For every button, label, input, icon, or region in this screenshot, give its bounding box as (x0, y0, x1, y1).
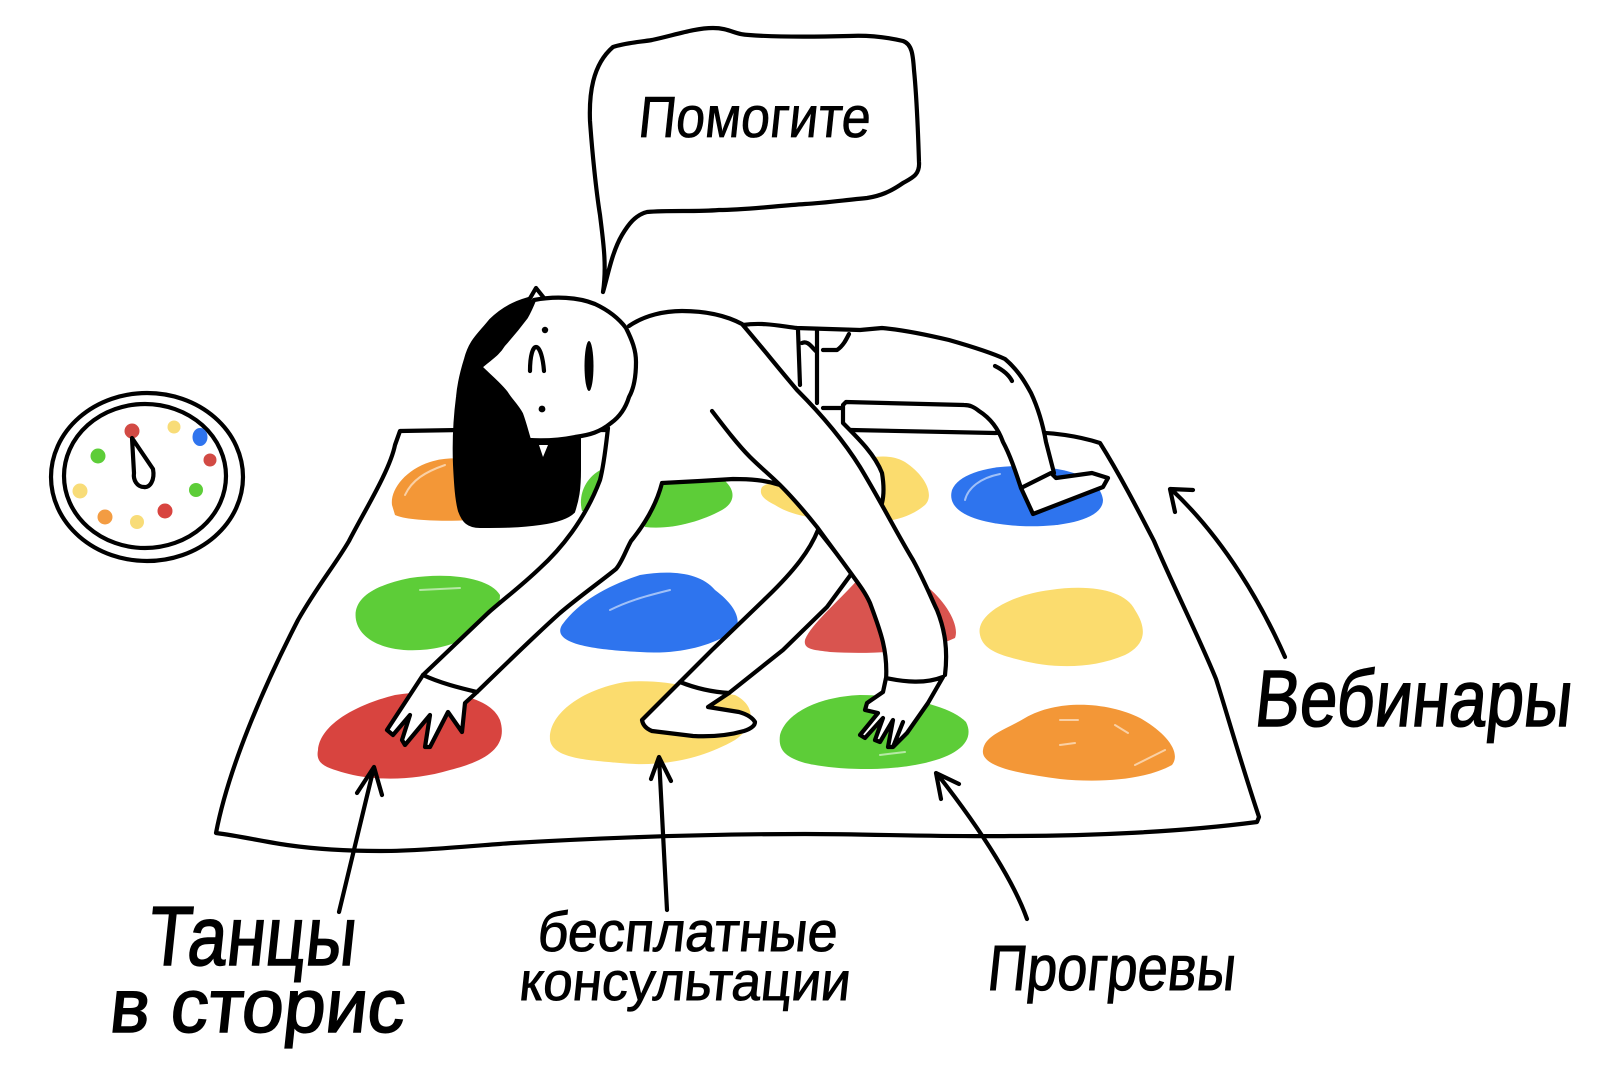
right hand (860, 677, 943, 747)
torso and arms fill (423, 311, 946, 692)
hair (454, 296, 580, 527)
back leg (743, 324, 1108, 514)
clock (51, 393, 243, 561)
label: dances in stories (106, 889, 410, 1049)
spot: orange bottom (983, 705, 1175, 781)
arrow to mat (1170, 489, 1285, 657)
label: free consultations: консультации (517, 952, 854, 1012)
spot: green middle (356, 576, 500, 650)
eye dots (542, 327, 548, 333)
label: free consultations: бесплатные (535, 900, 841, 963)
front leg and foot (642, 530, 852, 736)
trouser seams (798, 330, 1012, 408)
spot: red bottom (318, 692, 502, 779)
label: dances in stories: в сторис (106, 964, 410, 1049)
spot: yellow middle (980, 588, 1143, 666)
nose (530, 347, 544, 371)
spot: blue middle (560, 573, 738, 653)
arrow to green spot (936, 773, 1027, 919)
spot: green bottom (780, 695, 969, 769)
spot: orange top (392, 458, 470, 521)
spot: green top left (581, 469, 610, 511)
label: free consultations (517, 900, 854, 1012)
spot: red middle (805, 577, 956, 653)
spot: yellow bottom (550, 681, 751, 764)
speech text: Помогите (636, 85, 874, 150)
arrow to red spot (339, 767, 382, 912)
spot: green top (642, 481, 733, 528)
mouth (584, 341, 594, 391)
front leg cuff (680, 682, 729, 693)
colored spots (318, 457, 1175, 781)
spot: blue top (951, 466, 1103, 526)
label: warm-ups: Прогревы (985, 932, 1240, 1004)
arrow to yellow spot (651, 757, 671, 910)
collar notch (539, 445, 548, 457)
person (387, 288, 1108, 747)
spot highlights (405, 465, 1165, 765)
twister mat (216, 430, 1259, 851)
speech bubble (590, 28, 919, 292)
clock hand (132, 438, 153, 487)
left hand (387, 675, 477, 747)
label: dances in stories: Танцы (144, 889, 362, 983)
head (480, 298, 636, 440)
spot: yellow top (761, 457, 929, 522)
torso and arm outlines (423, 311, 946, 692)
hair tip (529, 288, 544, 300)
